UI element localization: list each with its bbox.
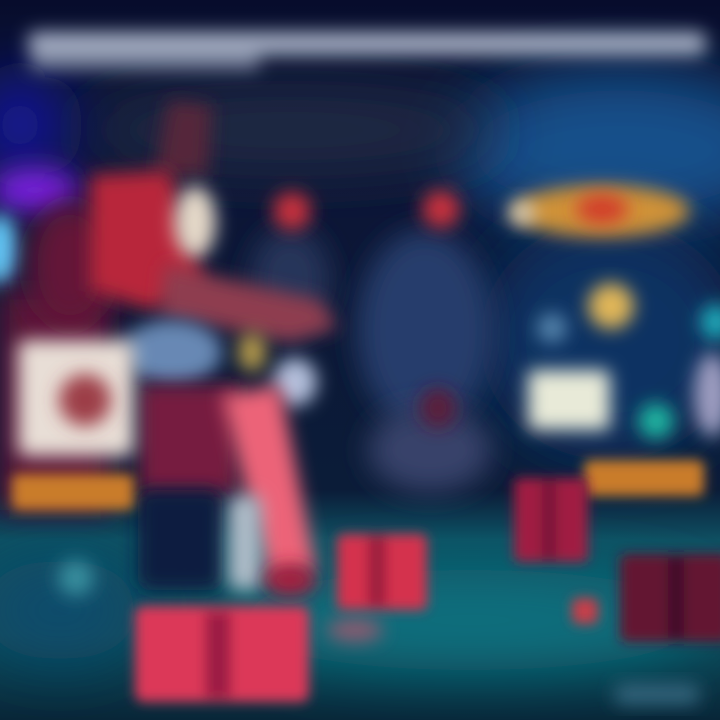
- left white card: [18, 340, 134, 456]
- red gift box: right: [514, 478, 588, 562]
- teal circle: [638, 403, 674, 439]
- left orange label: [12, 474, 134, 510]
- right orange label: [584, 460, 704, 496]
- left purple glow and blue orb: [0, 168, 110, 510]
- yellow orb: [588, 283, 634, 329]
- lower-left teal icon: [58, 560, 94, 596]
- player figure: [28, 100, 338, 590]
- small red box: [572, 598, 598, 624]
- small floor tokens: [264, 564, 699, 704]
- red gift box: front large: [135, 606, 309, 702]
- pale blue icon: [537, 313, 567, 343]
- right edge teal and pale shapes: [694, 304, 720, 437]
- red gift box: centre: [337, 534, 427, 610]
- title placeholder: illegible blurred heading: [28, 32, 706, 70]
- dark red gift box: far right: [620, 554, 720, 642]
- right white card: [528, 370, 610, 430]
- central dark figures: [250, 190, 493, 492]
- top-right orange oval badge: [509, 185, 690, 237]
